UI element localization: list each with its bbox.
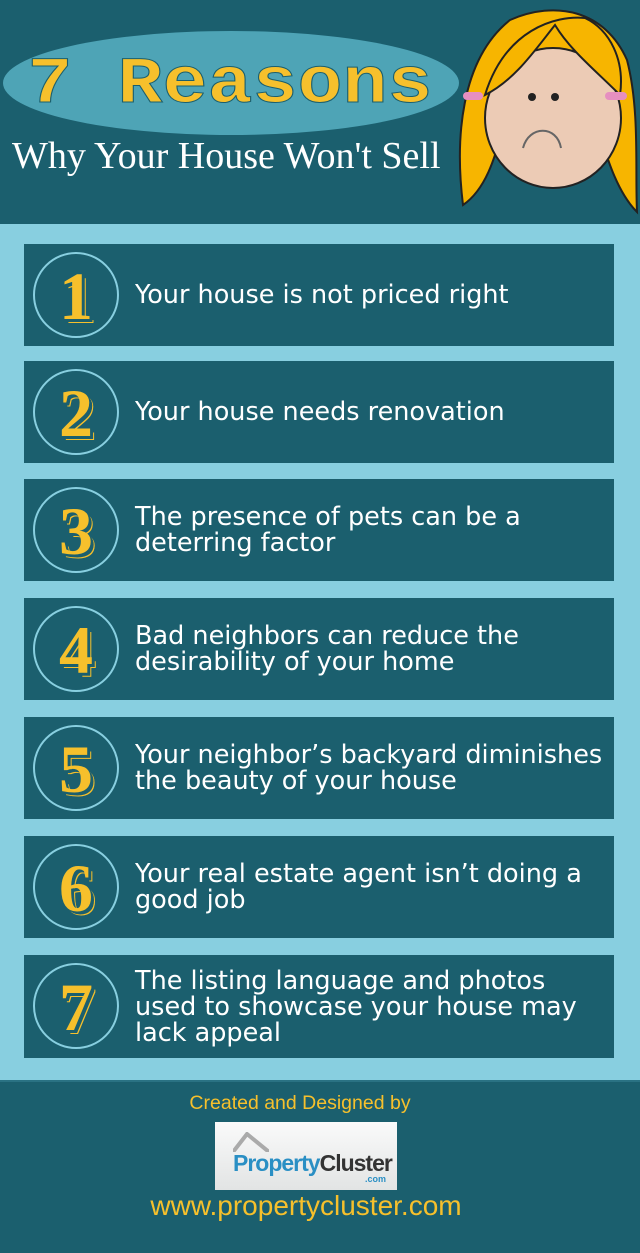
title ellipse: 7 Reasons [28, 47, 433, 122]
footer [0, 1080, 640, 1253]
title ellipse [3, 31, 459, 135]
panel: reason 5: 5 [59, 731, 93, 807]
panel: reason 6 [24, 836, 614, 938]
header [0, 0, 640, 224]
subtitle: Why Your House Won't Sell [12, 135, 441, 177]
panel: reason 5: Your neighbor’s backyard diminishes the beauty of your house [135, 740, 602, 796]
panel: reason 1: Your house is not priced right [135, 280, 509, 310]
panel: reason 7: 7 [59, 969, 93, 1045]
panel: reason 7 [24, 955, 614, 1058]
panel: reason 5 [24, 717, 614, 819]
panel: reason 3 [24, 479, 614, 581]
logo [215, 1122, 397, 1190]
panel: reason 7: used to showcase your house may lack appeal [135, 992, 577, 1048]
panel: reason 3: 3 [59, 493, 93, 569]
logo: .com [365, 1174, 386, 1184]
credit text: Created and Designed by [189, 1092, 411, 1114]
panel: reason 1: 1 [59, 258, 93, 334]
panel: reason 4: 4 [59, 612, 93, 688]
panel: reason 1 [24, 244, 614, 346]
panel: reason 6: 6 [59, 850, 93, 926]
panel: reason 4: Bad neighbors can reduce the desirability of your home [135, 621, 519, 677]
panel: reason 6: Your real estate agent isn’t doing a good job [135, 859, 582, 915]
panel: reason 7: The listing language and photos [135, 966, 545, 996]
website url: www.propertycluster.com [150, 1190, 462, 1221]
panel: reason 2: 2 [59, 375, 93, 451]
logo: PropertyCluster [233, 1150, 392, 1176]
panel: reason 2 [24, 361, 614, 463]
panel: reason 4 [24, 598, 614, 700]
panel: reason 2: Your house needs renovation [135, 397, 505, 427]
icon: sad girl face [458, 9, 638, 214]
panel: reason 3: The presence of pets can be a deterring factor [135, 502, 521, 558]
